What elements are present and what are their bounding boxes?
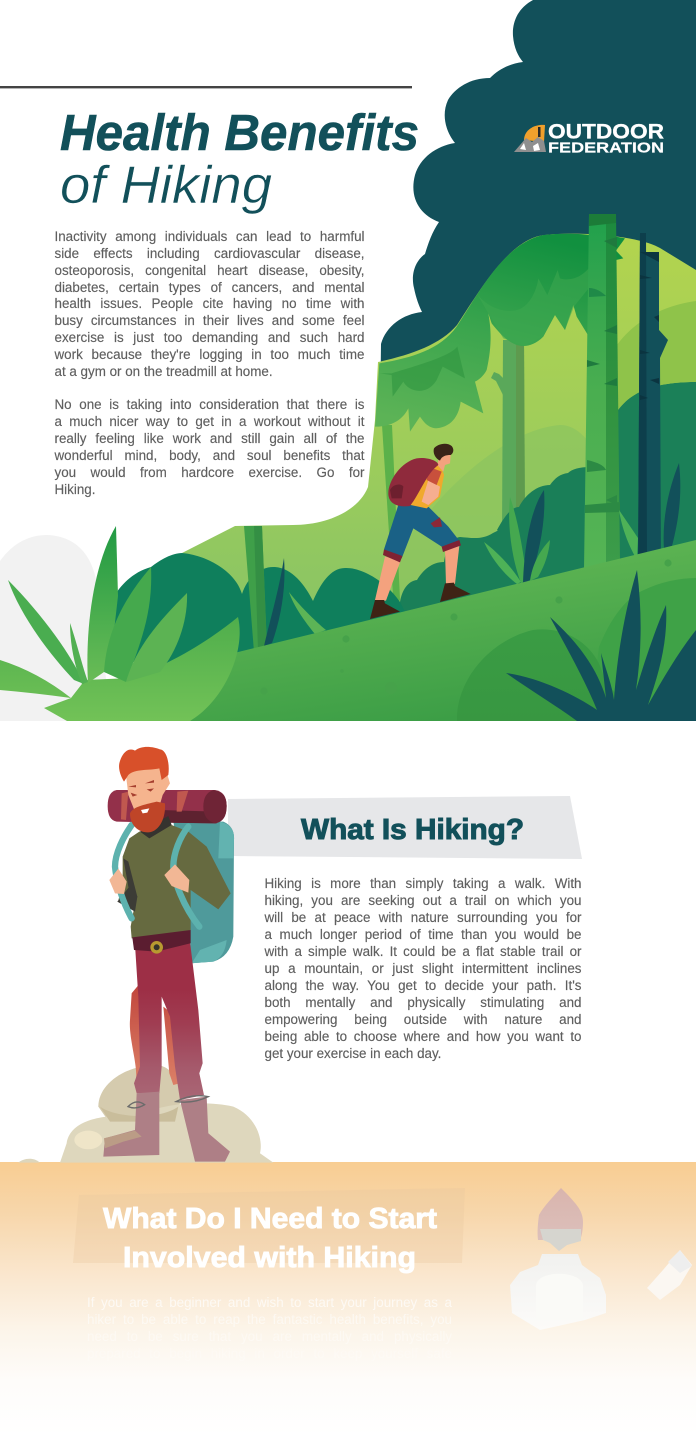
what is hiking text block	[264, 876, 582, 1062]
hiker cuffs	[383, 540, 461, 562]
intro text block: work because they're logging in too much time	[54, 347, 364, 362]
faded section heading: Involved with Hiking	[123, 1242, 416, 1274]
banner heading: What Is Hiking?	[301, 814, 524, 846]
hiker in forest	[370, 444, 471, 619]
right dark plant	[506, 570, 696, 721]
intro text block: wonderful mind, body, and soul benefits that	[54, 448, 364, 463]
eyes	[128, 780, 154, 797]
intro text block: you would from hardcore exercise. Go for	[54, 465, 364, 480]
faint mountains	[647, 1250, 692, 1300]
logo: FEDERATION	[548, 140, 664, 156]
trunk: tall green	[584, 214, 620, 570]
faded section text block	[87, 1295, 452, 1361]
what is hiking text block: Hiking is more than simply taking a walk. With	[264, 876, 582, 891]
title: Health Benefits	[60, 104, 419, 161]
right foreground mound	[590, 578, 696, 721]
what is hiking text block: up a mountain, or just slight intermittent inclines	[264, 961, 582, 976]
intro text block	[54, 229, 364, 498]
small blades behind left hill	[264, 558, 326, 646]
hiker rear leg	[375, 557, 401, 601]
hiker head	[437, 453, 451, 472]
intro text block: Inactivity among individuals can lead to harmful	[54, 229, 364, 244]
faded backpack	[510, 1254, 606, 1330]
beard	[130, 802, 165, 832]
heading banner	[73, 1188, 465, 1263]
backpack straps	[115, 825, 199, 927]
hands	[109, 864, 189, 894]
faded section text block: hiker to be able to reap the fantastic health benefits, you	[87, 1312, 452, 1327]
logo text: OUTDOOR	[548, 120, 664, 144]
dark teal tree canopy	[380, 0, 696, 420]
mid-right bushes	[400, 467, 620, 622]
intro text block: osteoporosis, congenital heart disease, obesity,	[54, 263, 364, 278]
what is hiking text block: with a simple walk. It could be a flat stable trail or	[264, 944, 582, 959]
belt and buckle	[132, 930, 191, 954]
what is hiking text block: empowering being outside with nature and	[264, 1012, 582, 1027]
trunk: thin left	[382, 425, 400, 610]
head	[119, 747, 170, 832]
intro text block: Hiking.	[54, 482, 95, 497]
central grass blades	[484, 490, 550, 584]
hiker backpack	[388, 458, 438, 506]
what is hiking text block: will be at peace with nature surrounding you for	[264, 910, 582, 925]
logo icon	[514, 125, 546, 152]
hiker shorts	[384, 505, 460, 558]
hair	[119, 747, 169, 782]
faded hiker figure	[510, 1188, 606, 1330]
what is hiking text block: both mentally and physically stimulating and	[264, 995, 582, 1010]
intro text block: side effects including cardiovascular disease,	[54, 246, 364, 261]
sweater	[118, 825, 231, 938]
trousers and boots	[103, 942, 230, 1162]
left grass plant	[8, 526, 187, 684]
main hillside	[190, 540, 696, 721]
small right blades	[619, 463, 680, 560]
panel: what do I need section art	[73, 1188, 692, 1330]
collar	[140, 816, 172, 838]
hiker front leg	[445, 546, 459, 584]
hiker pocket	[431, 517, 442, 527]
what is hiking text block: along the way. You get to decide your path. It's	[264, 978, 582, 993]
title: of Hiking	[60, 156, 273, 215]
intro text block: exercise is just too demanding and such hard	[54, 330, 364, 345]
faded section heading	[103, 1203, 437, 1274]
trunk: middle	[491, 340, 525, 535]
faded section text block: need to be sure that you are mentally and physically	[87, 1329, 452, 1344]
what is hiking text block: being able to choose where and how you want to	[264, 1029, 582, 1044]
bedroll	[108, 790, 227, 823]
logo	[514, 120, 664, 156]
bottom section background	[0, 1162, 696, 1436]
intro text block: really feeling like work and still gain all of the	[54, 431, 364, 446]
right back hill	[618, 382, 696, 570]
forest canopy foliage	[375, 234, 625, 432]
panel: hero forest scene	[0, 0, 696, 721]
standing hiker character	[18, 747, 273, 1163]
trunk: dark teal	[638, 233, 668, 574]
faded section heading: What Do I Need to Start	[103, 1203, 437, 1235]
centre foreground mound	[457, 629, 640, 721]
grey background blob	[0, 535, 110, 721]
soft lighter clearing	[395, 425, 620, 620]
rocks	[18, 1065, 273, 1163]
title	[60, 104, 419, 215]
hill dots	[260, 559, 672, 695]
legs coral back	[130, 983, 180, 1085]
panel: what is hiking banner	[228, 796, 582, 859]
hiker boots	[370, 583, 471, 619]
trunk: left lower	[244, 526, 267, 652]
lime forest background	[118, 234, 696, 655]
faded section text block: prepared to begin hiking in order to keep yourself safe	[87, 1346, 452, 1361]
intro text block: at a gym or on the treadmill at home.	[54, 364, 273, 379]
intro text block: No one is taking into consideration that there is	[54, 397, 364, 412]
what is hiking text block: a much longer period of time than you would be	[264, 927, 582, 942]
hiker arm	[422, 480, 440, 505]
hiker hair	[434, 444, 453, 461]
banner shape	[228, 796, 582, 859]
faded section text block: If you are a beginner and wish to start your journey as a	[87, 1295, 452, 1310]
intro text block: busy circumstances in their lives and some feel	[54, 313, 364, 328]
intro text block: diabetes, certain types of cancers, and mental	[54, 280, 364, 295]
what is hiking text block: hiking, you are seeking out a trail on which you	[264, 893, 582, 908]
intro text block: health issues. People cite having no time with	[54, 296, 364, 311]
hiker shirt	[411, 463, 444, 508]
intro text block: a much nicer way to get in a workout without it	[54, 414, 364, 429]
right lime swell	[617, 301, 696, 410]
divider rule	[0, 86, 412, 88]
faded hood	[538, 1188, 583, 1240]
left foreground mound	[0, 617, 240, 721]
what is hiking text block: get your exercise in each day.	[264, 1046, 441, 1061]
left bushes	[112, 553, 420, 670]
backpack	[173, 822, 234, 963]
